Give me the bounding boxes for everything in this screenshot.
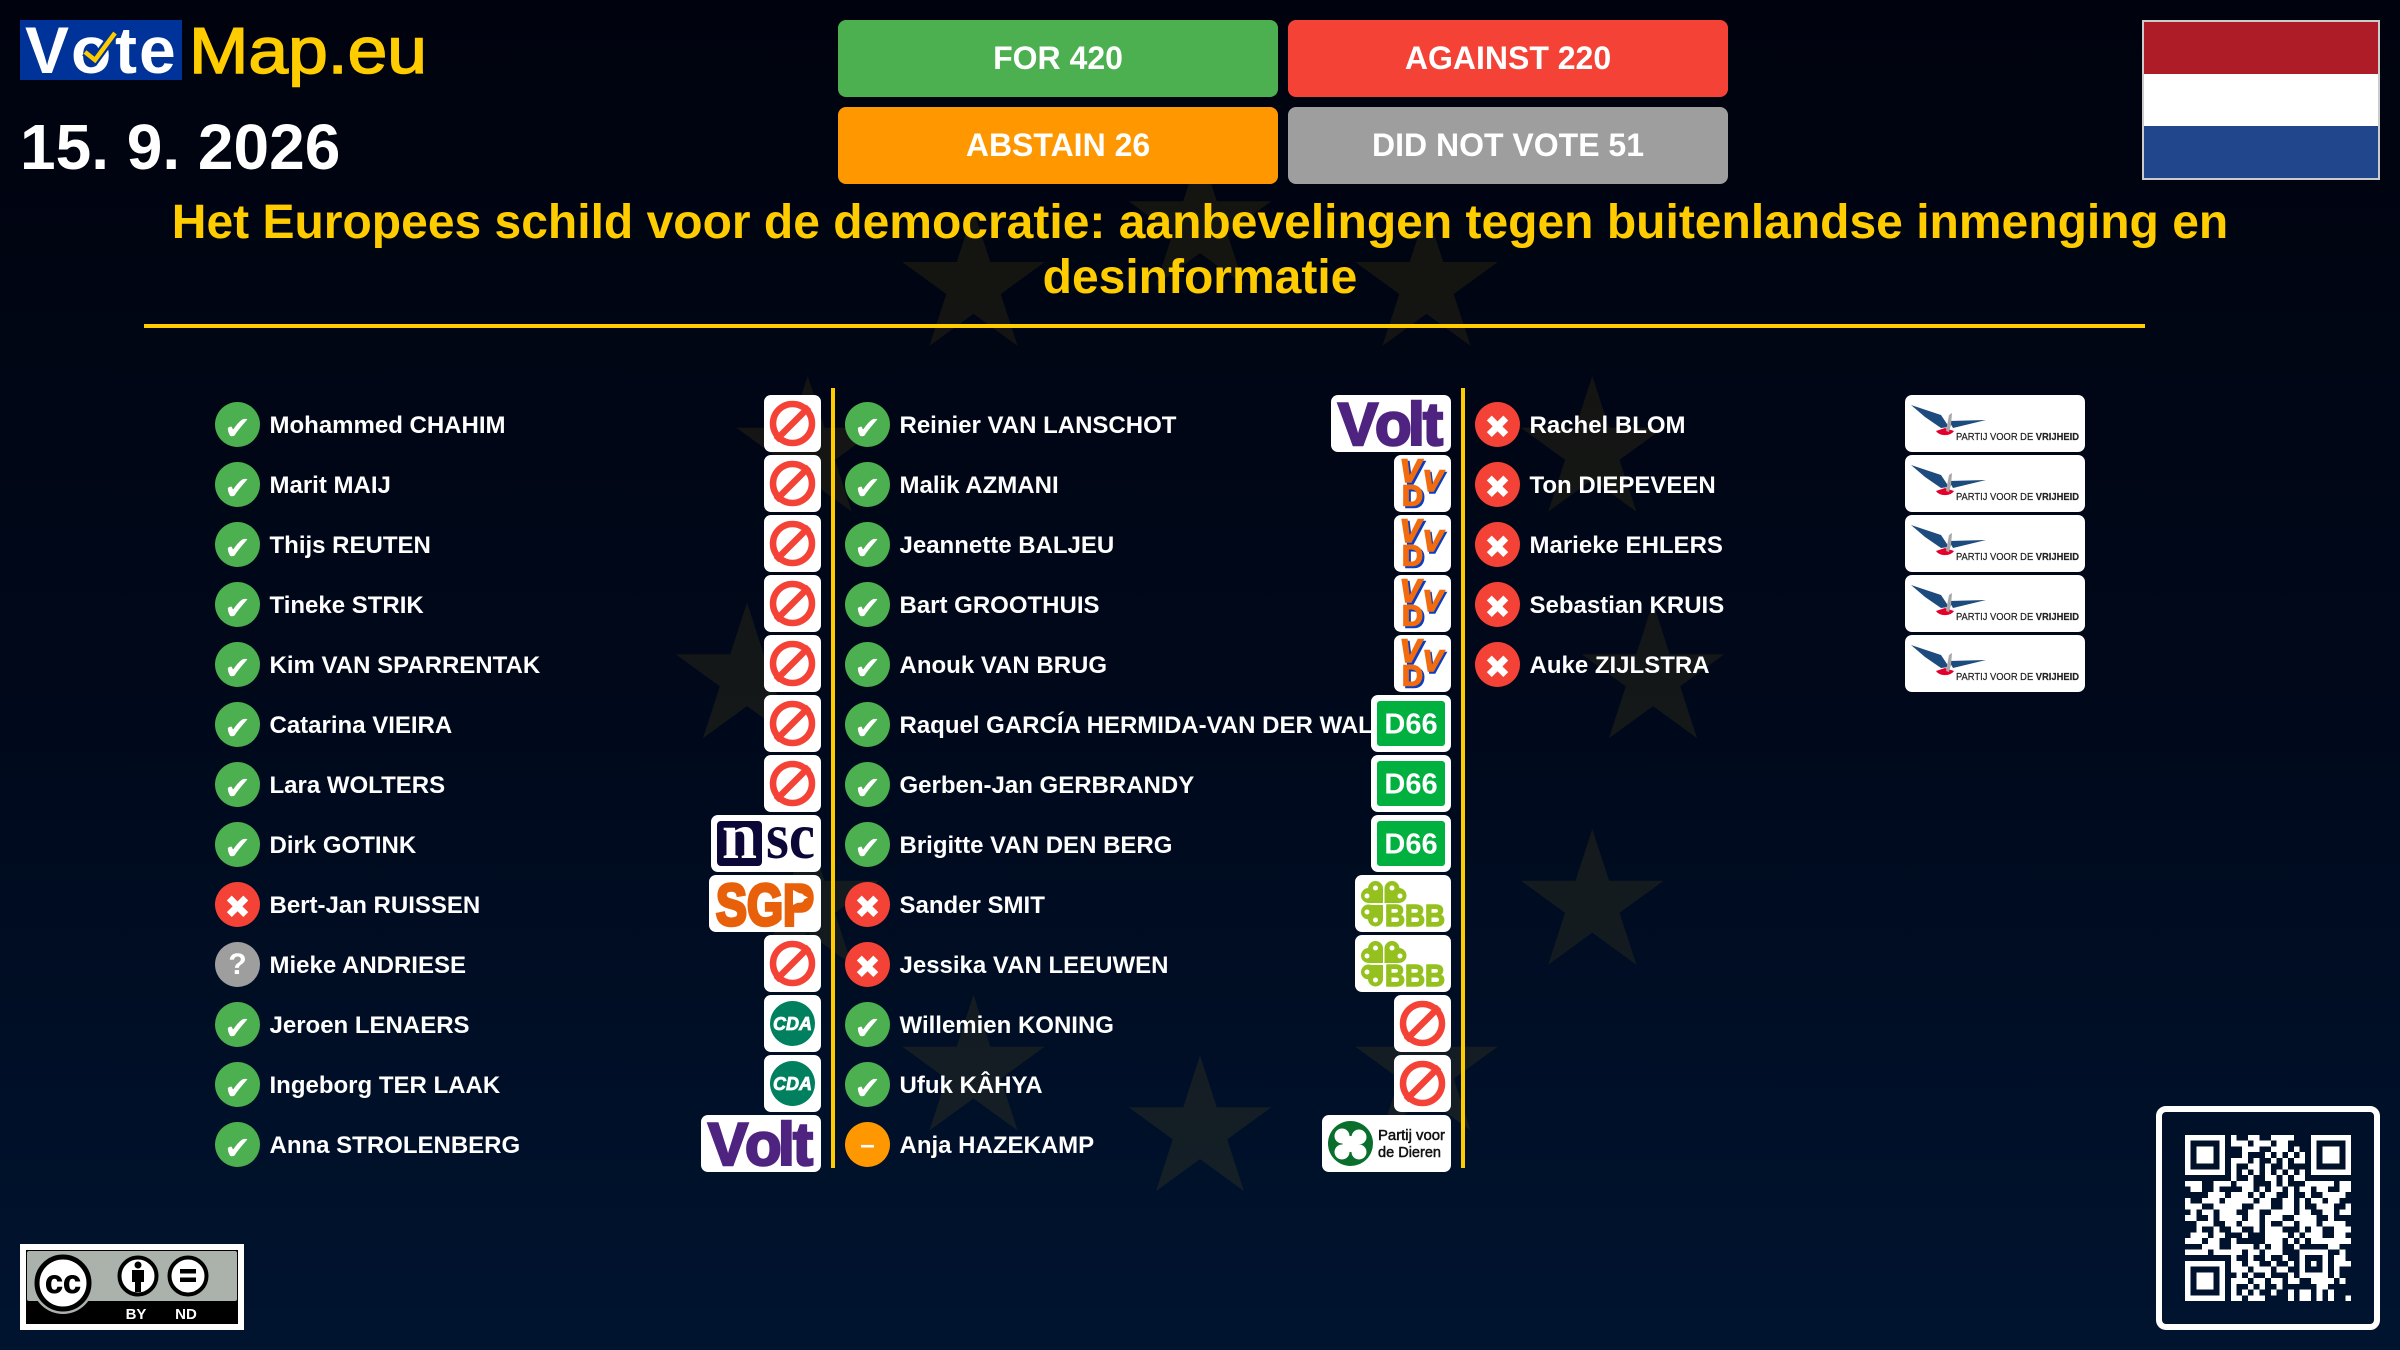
vote icon: against: [1475, 582, 1520, 627]
party logo: PVV: [1905, 515, 2085, 572]
row: Kim VAN SPARRENTAK: [215, 635, 821, 692]
vote icon: against: ✖: [1484, 648, 1511, 686]
party logo: Volt: [1331, 395, 1451, 452]
name: Mieke ANDRIESE: [270, 952, 466, 979]
licence badge: CC BY-ND: ND: [175, 1306, 197, 1323]
party logo: VVD: V: [1402, 515, 1426, 551]
vote icon: for: [215, 402, 260, 447]
name: Marieke EHLERS: [1530, 532, 1723, 559]
vote icon: for: ✔: [854, 409, 881, 447]
name: Sebastian KRUIS: [1530, 592, 1724, 619]
name: Willemien KONING: [900, 1012, 1114, 1039]
name: Raquel GARCÍA HERMIDA-VAN DER WAL: [900, 712, 1373, 739]
vote icon: for: [215, 822, 260, 867]
party logo: PVV: [1905, 455, 2085, 512]
row: Tineke STRIK: [215, 575, 821, 632]
name: Malik AZMANI: [900, 472, 1059, 499]
vote icon: against: ✖: [1484, 408, 1511, 446]
vote icon: against: ✖: [854, 888, 881, 926]
party logo: PVV: [1905, 395, 2085, 452]
row: Marit MAIJ: [215, 455, 821, 512]
name: Auke ZIJLSTRA: [1530, 652, 1710, 679]
name: Catarina VIEIRA: [270, 712, 452, 739]
vote icon: for: ✔: [224, 649, 251, 687]
vote icon: for: [215, 1062, 260, 1107]
vote icon: for: [845, 522, 890, 567]
party logo: VVD: [1394, 455, 1451, 512]
name: Sander SMIT: [900, 892, 1045, 919]
vote icon: abstain: [845, 1122, 890, 1167]
party logo: CDA: [764, 1055, 821, 1112]
vote icon: for: [845, 402, 890, 447]
party logo: PVV: PARTIJ VOOR DE VRIJHEID: [1956, 611, 2079, 623]
party logo: D66: [1371, 695, 1451, 752]
vote icon: for: ✔: [224, 1009, 251, 1047]
vote icon: for: [845, 642, 890, 687]
vote icon: against: ✖: [1484, 588, 1511, 626]
party logo: none: [764, 755, 821, 812]
party logo: PVV: [1905, 635, 2085, 692]
vote icon: for: ✔: [224, 1069, 251, 1107]
vote icon: for: ✔: [854, 529, 881, 567]
row: Anouk VAN BRUG: [845, 635, 1451, 692]
party logo: CDA: CDA: [773, 1074, 812, 1094]
party logo: D66: [1371, 755, 1451, 812]
name: Anouk VAN BRUG: [900, 652, 1107, 679]
vote icon: for: [215, 1122, 260, 1167]
vote tally: for: [838, 20, 1278, 97]
vote icon: for: ✔: [224, 709, 251, 747]
row: Malik AZMANI: [845, 455, 1451, 512]
vote icon: for: ✔: [224, 409, 251, 447]
party logo: BBB: [1355, 875, 1451, 932]
party logo: none: [764, 455, 821, 512]
party logo: VVD: V: [1402, 575, 1426, 611]
party logo: PVV: PARTIJ VOOR DE VRIJHEID: [1956, 551, 2079, 563]
vote icon: for: ✔: [854, 589, 881, 627]
vote icon: for: [215, 762, 260, 807]
licence badge: CC BY-ND: [20, 1244, 244, 1330]
row: Willemien KONING: [845, 995, 1451, 1052]
party logo: PVV: PARTIJ VOOR DE VRIJHEID: [1956, 431, 2079, 443]
logo: VoteMap.eu: e: [139, 13, 176, 87]
vote icon: for: [215, 522, 260, 567]
vote icon: did not vote: ?: [228, 948, 247, 981]
row: Brigitte VAN DEN BERG: [845, 815, 1451, 872]
vote icon: for: ✔: [224, 829, 251, 867]
flag: Netherlands: [2142, 20, 2380, 180]
name: Bart GROOTHUIS: [900, 592, 1100, 619]
vote icon: for: ✔: [854, 829, 881, 867]
row: Rachel BLOM: [1475, 395, 2085, 452]
vote tally: abstain: [838, 107, 1278, 184]
party logo: PVV: PARTIJ VOOR DE VRIJHEID: [1956, 671, 2079, 683]
party logo: BBB: [1355, 935, 1451, 992]
name: Brigitte VAN DEN BERG: [900, 832, 1172, 859]
row: Reinier VAN LANSCHOT: [845, 395, 1451, 452]
title: Het Europees schild voor de democratie: aanbevelingen tegen buitenlandse inmenging en: [172, 196, 2228, 249]
vote icon: for: ✔: [854, 709, 881, 747]
title: [172, 196, 2228, 304]
vote icon: for: ✔: [224, 1129, 251, 1167]
vote icon: against: ✖: [854, 948, 881, 986]
licence badge: CC BY-ND: cc: [45, 1263, 81, 1300]
vote icon: for: [215, 1002, 260, 1047]
row: Ton DIEPEVEEN: [1475, 455, 2085, 512]
name: Bert-Jan RUISSEN: [270, 892, 480, 919]
vote icon: abstain: –: [860, 1129, 875, 1159]
party logo: Partij voor de Dieren: de Dieren: [1378, 1144, 1441, 1161]
row: Jessika VAN LEEUWEN: [845, 935, 1451, 992]
vote tally: did not vote: [1288, 107, 1728, 184]
row: Mohammed CHAHIM: [215, 395, 821, 452]
party logo: D66: D66: [1384, 708, 1438, 740]
party logo: VVD: V: [1424, 467, 1447, 500]
vote tally: did not vote: DID NOT VOTE 51: [1372, 127, 1644, 163]
vote icon: for: [845, 462, 890, 507]
party logo: PVV: [1905, 575, 2085, 632]
row: Sebastian KRUIS: [1475, 575, 2085, 632]
party logo: VVD: D: [1402, 540, 1423, 572]
party logo: D66: [1371, 815, 1451, 872]
name: Ingeborg TER LAAK: [270, 1072, 500, 1099]
name: Anja HAZEKAMP: [900, 1132, 1094, 1159]
vote icon: for: ✔: [224, 469, 251, 507]
vote icon: for: [845, 582, 890, 627]
row: Marieke EHLERS: [1475, 515, 2085, 572]
vote icon: for: [215, 582, 260, 627]
vote icon: for: [215, 462, 260, 507]
row: Bart GROOTHUIS: [845, 575, 1451, 632]
party logo: VVD: V: [1422, 585, 1446, 618]
party logo: D66: D66: [1384, 828, 1438, 860]
party logo: VVD: V: [1422, 465, 1446, 498]
vote icon: against: ✖: [1484, 468, 1511, 506]
vote icon: for: [215, 702, 260, 747]
logo: VoteMap.eu: V: [25, 13, 69, 87]
vote icon: against: [1475, 462, 1520, 507]
party logo: VVD: V: [1402, 635, 1426, 671]
QR code: [2156, 1106, 2380, 1330]
title: desinformatie: [1043, 251, 1357, 304]
vote tally: against: AGAINST 220: [1405, 40, 1611, 76]
vote tally: abstain: ABSTAIN 26: [966, 127, 1150, 163]
name: Jessika VAN LEEUWEN: [900, 952, 1168, 979]
party logo: VVD: [1394, 635, 1451, 692]
party logo: CDA: [764, 995, 821, 1052]
party logo: none: [764, 395, 821, 452]
row: Thijs REUTEN: [215, 515, 821, 572]
vote icon: against: [1475, 522, 1520, 567]
row: Sander SMIT: [845, 875, 1451, 932]
party logo: Partij voor de Dieren: [1322, 1115, 1451, 1172]
row: Jeannette BALJEU: [845, 515, 1451, 572]
vote icon: against: [845, 942, 890, 987]
vote icon: for: ✔: [224, 529, 251, 567]
logo: VoteMap.eu: o: [71, 13, 111, 87]
vote icon: for: ✔: [224, 589, 251, 627]
vote icon: for: [845, 762, 890, 807]
name: Kim VAN SPARRENTAK: [270, 652, 540, 679]
vote tally: for: FOR 420: [993, 40, 1123, 76]
logo: VoteMap.eu: Map.eu: [189, 14, 427, 87]
name: Rachel BLOM: [1530, 412, 1686, 439]
vote icon: for: ✔: [854, 1009, 881, 1047]
name: Ufuk KÂHYA: [900, 1072, 1043, 1099]
logo: VoteMap.eu: [20, 13, 427, 88]
row: Ingeborg TER LAAK: [215, 1055, 821, 1112]
row: Bert-Jan RUISSEN: [215, 875, 821, 932]
name: Mohammed CHAHIM: [270, 412, 506, 439]
party logo: Volt: [701, 1115, 821, 1172]
party logo: none: [1394, 1055, 1451, 1112]
row: Gerben-Jan GERBRANDY: [845, 755, 1451, 812]
vote icon: against: [845, 882, 890, 927]
vote icon: against: [1475, 642, 1520, 687]
party logo: none: [1394, 995, 1451, 1052]
vote icon: for: [215, 642, 260, 687]
vote tally: against: [1288, 20, 1728, 97]
party logo: Partij voor de Dieren: Partij voor: [1378, 1127, 1445, 1144]
party logo: NSC: [711, 815, 821, 872]
vote icon: for: [845, 702, 890, 747]
row: Ufuk KÂHYA: [845, 1055, 1451, 1112]
party logo: VVD: V: [1422, 525, 1446, 558]
name: Gerben-Jan GERBRANDY: [900, 772, 1194, 799]
party logo: none: [764, 695, 821, 752]
name: Tineke STRIK: [270, 592, 424, 619]
party logo: none: [764, 515, 821, 572]
party logo: VVD: D: [1402, 660, 1423, 692]
row: Dirk GOTINK: [215, 815, 821, 872]
party logo: VVD: V: [1424, 587, 1447, 620]
vote icon: for: [845, 1062, 890, 1107]
vote icon: for: ✔: [854, 649, 881, 687]
party logo: VVD: V: [1424, 527, 1447, 560]
name: Jeannette BALJEU: [900, 532, 1114, 559]
vote icon: against: ✖: [1484, 528, 1511, 566]
row: Jeroen LENAERS: [215, 995, 821, 1052]
row: Auke ZIJLSTRA: [1475, 635, 2085, 692]
name: Lara WOLTERS: [270, 772, 445, 799]
row: Raquel GARCÍA HERMIDA-VAN DER WAL: [845, 695, 1451, 752]
party logo: VVD: D: [1402, 600, 1423, 632]
name: Ton DIEPEVEEN: [1530, 472, 1716, 499]
name: Jeroen LENAERS: [270, 1012, 470, 1039]
vote icon: against: [1475, 402, 1520, 447]
party logo: VVD: [1394, 515, 1451, 572]
party logo: VVD: [1394, 575, 1451, 632]
name: Dirk GOTINK: [270, 832, 416, 859]
vote icon: for: [845, 822, 890, 867]
party logo: VVD: V: [1422, 645, 1446, 678]
licence badge: CC BY-ND: BY: [126, 1306, 146, 1323]
row: Lara WOLTERS: [215, 755, 821, 812]
vote icon: for: ✔: [854, 1069, 881, 1107]
name: Marit MAIJ: [270, 472, 391, 499]
party logo: PVV: PARTIJ VOOR DE VRIJHEID: [1956, 491, 2079, 503]
row: Anja HAZEKAMP: [845, 1115, 1451, 1172]
vote icon: for: ✔: [854, 769, 881, 807]
vote icon: for: ✔: [224, 769, 251, 807]
party logo: CDA: CDA: [773, 1014, 812, 1034]
vote icon: did not vote: [215, 942, 260, 987]
vote icon: for: [845, 1002, 890, 1047]
vote icon: against: [215, 882, 260, 927]
party logo: none: [764, 575, 821, 632]
vote icon: for: ✔: [854, 469, 881, 507]
party logo: none: [764, 635, 821, 692]
vote icon: against: ✖: [224, 888, 251, 926]
date: 15. 9. 2026: [20, 111, 340, 183]
logo: VoteMap.eu: t: [115, 13, 137, 87]
name: Thijs REUTEN: [270, 532, 431, 559]
row: Catarina VIEIRA: [215, 695, 821, 752]
party logo: none: [764, 935, 821, 992]
party logo: VVD: D: [1402, 480, 1423, 512]
party logo: VVD: V: [1402, 455, 1426, 491]
name: Anna STROLENBERG: [270, 1132, 520, 1159]
row: Mieke ANDRIESE: [215, 935, 821, 992]
party logo: D66: D66: [1384, 768, 1438, 800]
row: Anna STROLENBERG: [215, 1115, 821, 1172]
name: Reinier VAN LANSCHOT: [900, 412, 1176, 439]
party logo: VVD: V: [1424, 647, 1447, 680]
